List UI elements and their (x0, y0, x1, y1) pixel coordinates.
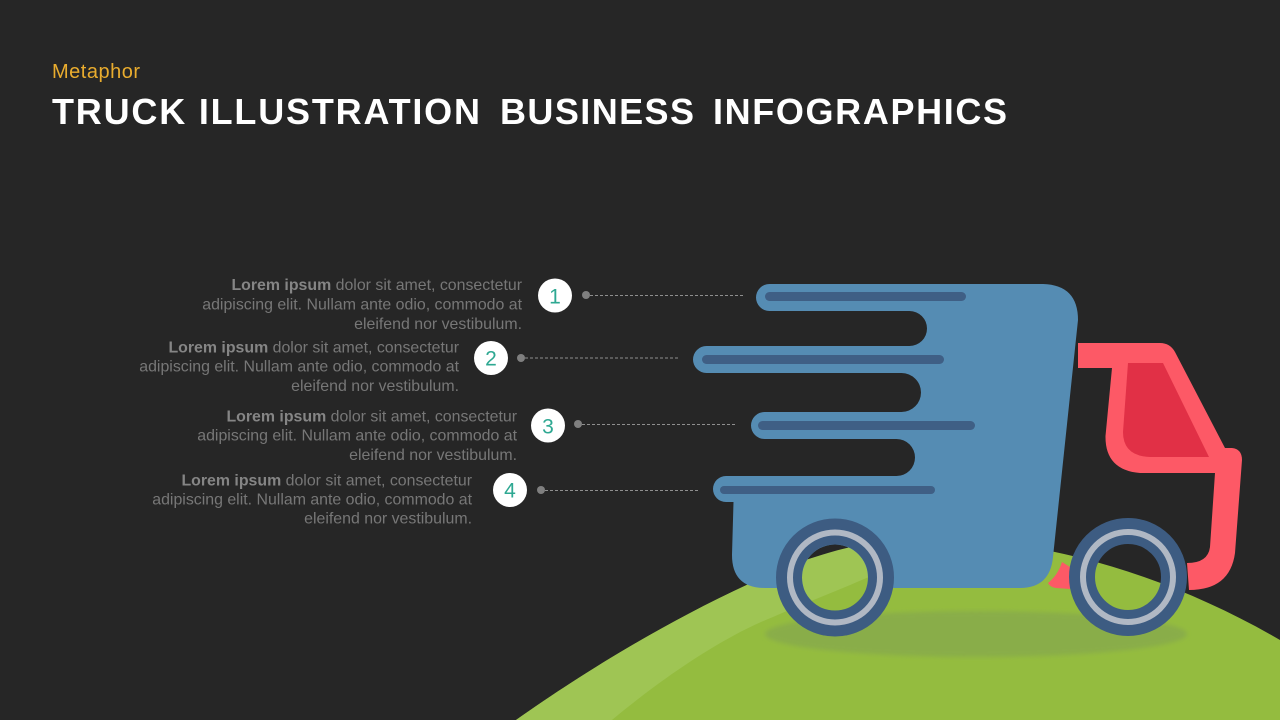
number badge 2: 2 (485, 348, 497, 370)
text block 3: dolor sit amet, consectetur (331, 408, 517, 426)
front wheel (1082, 531, 1174, 623)
text block 2: adipiscing elit. Nullam ante odio, commodo at (139, 358, 460, 376)
stripe 3 (758, 421, 975, 430)
title: BUSINESS (500, 91, 694, 132)
leader line 4 (537, 486, 699, 494)
stripe 1 (765, 292, 966, 301)
truck ground shadow (765, 611, 1187, 657)
text block 1: adipiscing elit. Nullam ante odio, commodo at (202, 296, 523, 314)
text block 4: eleifend nor vestibulum. (304, 510, 472, 528)
number badge 1: 1 (549, 286, 561, 308)
text block 3: Lorem ipsum (226, 408, 326, 426)
item 3: text and number marker (197, 408, 736, 464)
text block 4: dolor sit amet, consectetur (286, 472, 472, 490)
truck cab (1078, 343, 1242, 590)
item 1: text and number marker (202, 277, 743, 333)
text block 1: eleifend nor vestibulum. (354, 316, 522, 333)
text block 1: Lorem ipsum (231, 277, 331, 294)
text block 3: adipiscing elit. Nullam ante odio, commodo at (197, 428, 518, 444)
text block 4: adipiscing elit. Nullam ante odio, commodo at (152, 492, 473, 508)
number badge 1 (538, 278, 572, 312)
title: TRUCK ILLUSTRATION (52, 91, 480, 132)
text block 2: dolor sit amet, consectetur (273, 340, 459, 356)
stripe 2 (702, 355, 944, 364)
title: INFOGRAPHICS (713, 91, 1007, 132)
number badge 2 (474, 341, 508, 375)
text block 3: eleifend nor vestibulum. (349, 447, 517, 464)
item 4: text and number marker (152, 472, 699, 528)
hill highlight band (516, 545, 880, 720)
leader line 1 (582, 291, 743, 299)
leader line 3 (574, 420, 736, 428)
text block 4: Lorem ipsum (181, 472, 281, 490)
number badge 3 (531, 408, 565, 442)
text block 2: Lorem ipsum (168, 340, 268, 356)
green hill (516, 540, 1280, 720)
eyebrow label: Metaphor (52, 61, 140, 83)
cab window (1123, 363, 1209, 457)
title (52, 91, 1007, 132)
cab rear step (1048, 562, 1070, 589)
leader line 2 (517, 354, 679, 362)
text block 2: eleifend nor vestibulum. (291, 378, 459, 395)
stripe 4 (720, 486, 935, 494)
number badge 3: 3 (542, 416, 554, 438)
number badge 4 (493, 473, 527, 507)
rear wheel (789, 532, 881, 624)
truck illustration (693, 284, 1242, 624)
number badge 4: 4 (504, 480, 516, 502)
cargo body with speed stripes (693, 284, 1078, 588)
text block 1: dolor sit amet, consectetur (336, 277, 522, 294)
item 2: text and number marker (139, 340, 679, 395)
